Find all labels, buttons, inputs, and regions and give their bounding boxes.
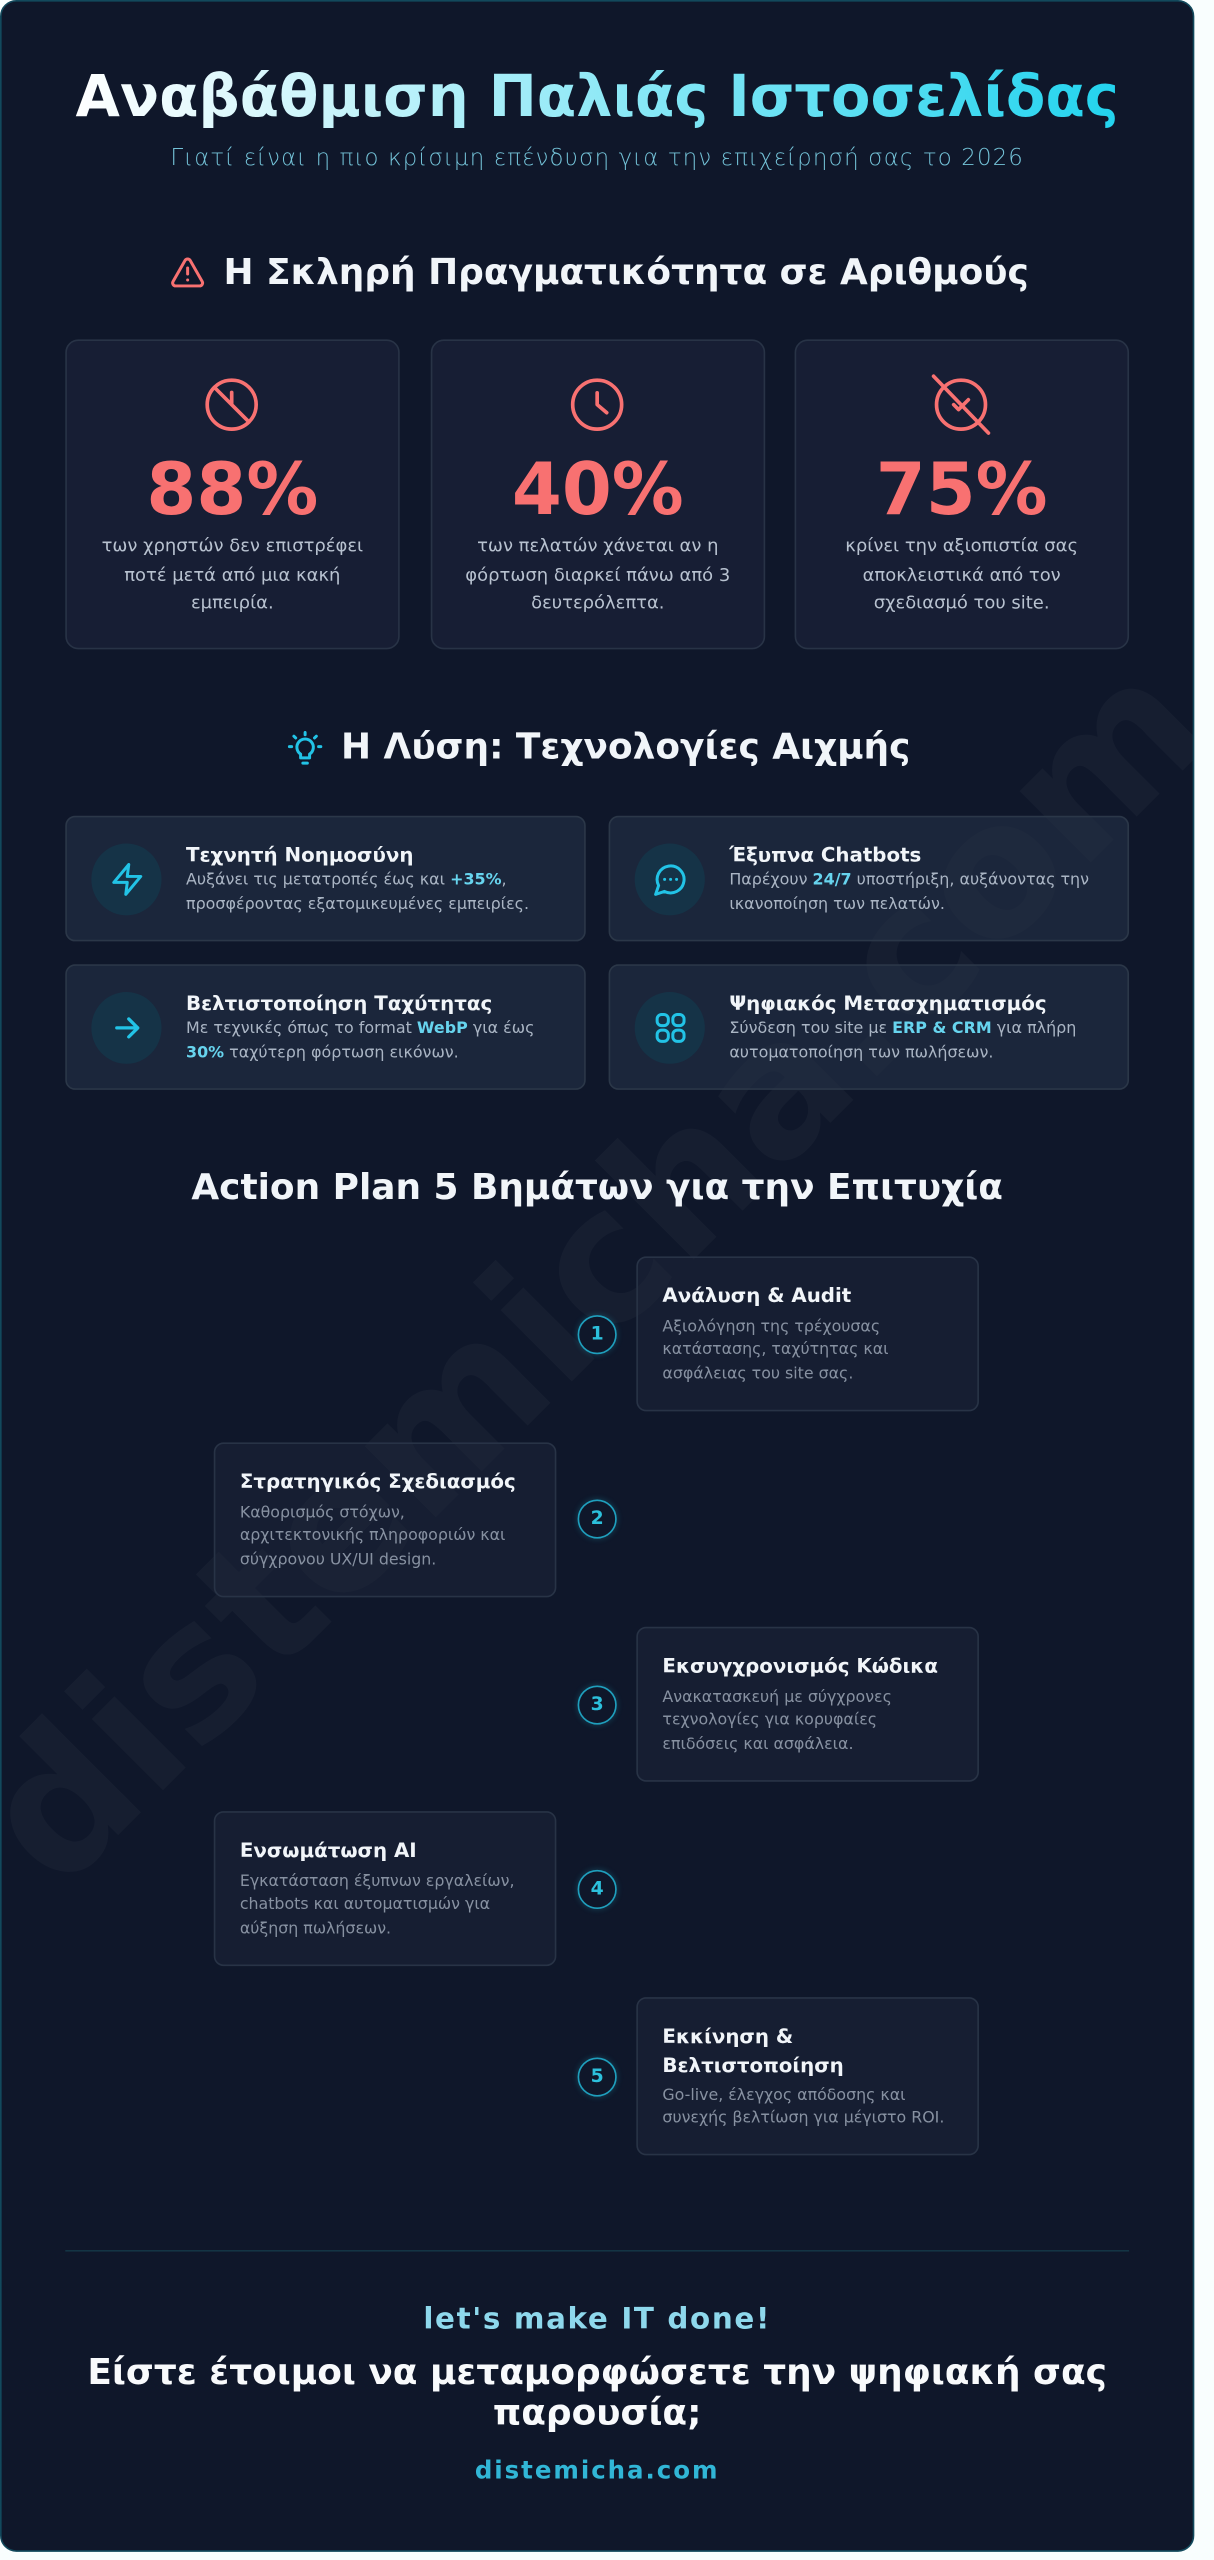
call to action heading (87, 2352, 1107, 2434)
website link: distemicha.com (475, 2456, 719, 2485)
step text (662, 2086, 944, 2128)
card text: Παρέχουν 24/7 υποστήριξη, αυξάνοντας την (729, 871, 1089, 889)
step text: επιδόσεις και ασφάλεια. (662, 1736, 853, 1754)
step text: ασφάλειας του site σας. (662, 1366, 853, 1384)
card text: Σύνδεση του site με ERP & CRM για πλήρη (729, 1020, 1076, 1038)
step text: συνεχής βελτίωση για μέγιστο ROI. (662, 2110, 944, 2128)
icon: crossed out check (932, 374, 990, 435)
step title: Ανάλυση & Audit (662, 1284, 851, 1307)
step 3 card (636, 1627, 979, 1781)
step 3 number (578, 1685, 617, 1725)
stat description: των πελατών χάνεται αν η (477, 536, 718, 557)
stat description: δευτερόλεπτα. (531, 593, 665, 614)
icon: lightning (91, 844, 162, 915)
stat description: κρίνει την αξιοπιστία σας (845, 536, 1078, 557)
panel: AI (65, 816, 585, 941)
subtitle: Γιατί είναι η πιο κρίσιμη επένδυση για την επιχείρησή σας το 2026 (170, 145, 1024, 171)
icon: arrow (91, 992, 162, 1064)
step title: Εκκίνηση & (662, 2025, 793, 2048)
panel: stat 40% (431, 340, 765, 649)
step text: Go-live, έλεγχος απόδοσης και (662, 2086, 906, 2104)
call to action heading: παρουσία; (493, 2393, 701, 2434)
step 1 number (578, 1315, 617, 1354)
heading: action plan: Action Plan 5 Βημάτων για την Επιτυχία (191, 1168, 1003, 1209)
stat description: των χρηστών δεν επιστρέφει (102, 536, 363, 557)
step title: Εκσυγχρονισμός Κώδικα (662, 1654, 938, 1677)
heading: hard reality: Η Σκληρή Πραγματικότητα σε Αριθμούς (224, 253, 1029, 294)
stat description: σχεδιασμό του site. (874, 593, 1050, 614)
stat description: αποκλειστικά από τον (863, 564, 1061, 585)
icon: chat bubble (635, 844, 705, 915)
panel: digital transformation (609, 964, 1128, 1090)
stat description: φόρτωση διαρκεί πάνω από 3 (465, 564, 730, 585)
step title (662, 2025, 844, 2077)
stat number: 75% (876, 448, 1048, 532)
card text: ικανοποίηση των πελατών. (729, 896, 945, 914)
card text (729, 871, 1089, 914)
step 4 number (578, 1870, 617, 1909)
step 5 number: 5 (591, 2064, 604, 2087)
step text (662, 1688, 892, 1754)
step text (240, 1504, 505, 1570)
stat number: 40% (512, 448, 684, 532)
step 5 card (636, 1997, 979, 2155)
step text: αύξηση πωλήσεων. (240, 1921, 391, 1939)
step text: αρχιτεκτονικής πληροφοριών και (240, 1528, 505, 1546)
step 2 number: 2 (591, 1506, 604, 1529)
step text: κατάστασης, ταχύτητας και (662, 1342, 888, 1360)
step 2 card (214, 1442, 556, 1597)
step text: chatbots και αυτοματισμών για (240, 1897, 490, 1915)
card text: αυτοματοποίηση των πωλήσεων. (729, 1045, 993, 1063)
stat number: 88% (146, 448, 318, 532)
card text: Αυξάνει τις μετατροπές έως και +35%, (186, 871, 507, 889)
card title: Ψηφιακός Μετασχηματισμός (729, 992, 1047, 1015)
step title: Βελτιστοποίηση (662, 2054, 844, 2077)
step 2 number (578, 1499, 617, 1539)
stat description: εμπειρία. (191, 593, 274, 614)
step title: Ενσωμάτωση AI (240, 1839, 417, 1862)
card text (186, 871, 529, 914)
icon: clock with slash (205, 378, 258, 431)
step text: τεχνολογίες για κορυφαίες (662, 1712, 877, 1730)
step text: Καθορισμός στόχων, (240, 1504, 405, 1522)
card text: προσφέροντας εξατομικευμένες εμπειρίες. (186, 896, 529, 914)
panel: chatbots (609, 816, 1128, 941)
card text (729, 1020, 1076, 1063)
call to action heading: Είστε έτοιμοι να μεταμορφώσετε την ψηφιακή σας (87, 2352, 1107, 2393)
step text: Ανακατασκευή με σύγχρονες (662, 1688, 892, 1706)
step text: Αξιολόγηση της τρέχουσας (662, 1318, 880, 1336)
step text (240, 1872, 515, 1939)
step 4 number: 4 (591, 1876, 604, 1899)
title: Αναβάθμιση Παλιάς Ιστοσελίδας (76, 64, 1119, 131)
icon: clock (570, 378, 624, 431)
icon: lightbulb (288, 731, 322, 765)
stat description: ποτέ μετά από μια κακή (124, 564, 340, 585)
step title: Στρατηγικός Σχεδιασμός (240, 1470, 516, 1493)
step 1 card (636, 1256, 979, 1411)
step 1 number: 1 (591, 1322, 604, 1344)
icon: grid (635, 992, 705, 1064)
panel: stat 88% (65, 340, 399, 649)
panel: speed (65, 964, 585, 1090)
step 3 number: 3 (591, 1692, 604, 1715)
stat description (845, 536, 1078, 614)
step 4 card (214, 1811, 556, 1965)
step text: σύγχρονου UX/UI design. (240, 1552, 436, 1570)
card text (186, 1020, 534, 1063)
card title: Τεχνητή Νοημοσύνη (186, 844, 413, 866)
step 5 number (578, 2057, 617, 2097)
card text: 30% ταχύτερη φόρτωση εικόνων. (186, 1045, 459, 1063)
step text: Εγκατάσταση έξυπνων εργαλείων, (240, 1872, 515, 1890)
panel: stat 75% (795, 340, 1129, 649)
card text: Με τεχνικές όπως το format WebP για έως (186, 1020, 534, 1038)
call to action tagline: let's make IT done! (423, 2302, 771, 2336)
stat description (102, 536, 363, 614)
step text (662, 1318, 888, 1384)
card title: Βελτιστοποίηση Ταχύτητας (186, 992, 492, 1015)
stat description (465, 536, 730, 614)
icon: warning triangle (171, 258, 204, 288)
card title: Έξυπνα Chatbots (729, 844, 921, 866)
heading: solution: Η Λύση: Τεχνολογίες Αιχμής (341, 728, 910, 768)
